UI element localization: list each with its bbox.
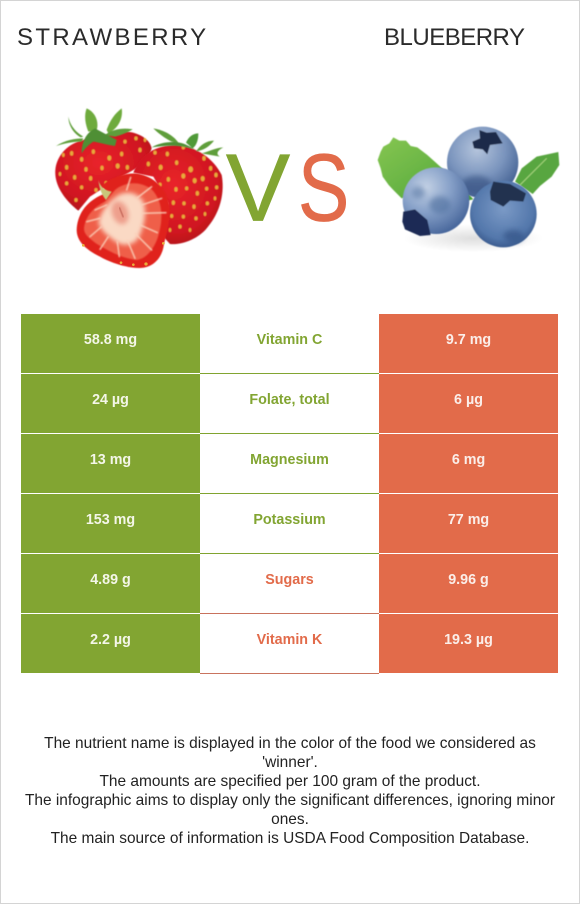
row: Vitamin C: 58.8 mg — [84, 332, 137, 348]
row: Vitamin K: 2.2 µg — [90, 632, 131, 648]
front berry — [470, 181, 537, 247]
row: Magnesium: 13 mg — [90, 452, 131, 468]
row: Potassium: 153 mg — [86, 512, 135, 528]
row: Vitamin K: Vitamin K — [257, 632, 322, 648]
right leaves — [152, 128, 223, 157]
row: Sugars: 4.89 g — [90, 572, 131, 588]
footnote text: The nutrient name is displayed in the color of the food we considered as — [44, 735, 536, 752]
cut strawberry — [77, 173, 170, 268]
title: strawberry: STRAWBERRY — [17, 24, 209, 51]
row: Vitamin C: Vitamin C — [257, 332, 322, 348]
row: Vitamin K: 19.3 µg — [444, 632, 493, 648]
footnote text: The infographic aims to display only the significant differences, ignoring minor — [25, 792, 555, 809]
row: Sugars — [21, 554, 558, 614]
footnote text: The amounts are specified per 100 gram of the product. — [99, 773, 480, 790]
row: Potassium: Potassium — [253, 512, 326, 528]
title: blueberry: BLUEBERRY — [384, 24, 524, 51]
row: Sugars: 9.96 g — [448, 572, 489, 588]
right leaf — [515, 152, 559, 194]
row: Vitamin C — [21, 314, 558, 374]
row: Potassium: 77 mg — [448, 512, 489, 528]
row: Magnesium: Magnesium — [250, 452, 329, 468]
row: Folate, total: 24 µg — [92, 392, 129, 408]
footnote text — [25, 735, 555, 847]
row: Sugars: Sugars — [265, 572, 314, 588]
footnote text: ones. — [271, 811, 309, 828]
row: Folate, total: 6 µg — [454, 392, 483, 408]
footnote text: 'winner'. — [262, 754, 318, 771]
icon: strawberries — [54, 108, 224, 269]
shadow — [403, 224, 543, 252]
right berry — [133, 145, 223, 244]
left berry — [402, 167, 469, 236]
table: nutrient comparison — [21, 314, 558, 674]
footnote text: The main source of information is USDA Food Composition Database. — [51, 830, 529, 847]
top berry — [447, 127, 518, 198]
back left leaves — [56, 108, 133, 153]
row: Potassium — [21, 494, 558, 554]
row: Folate, total — [21, 374, 558, 434]
icon: blueberries — [377, 126, 560, 248]
back left berry — [55, 131, 152, 211]
row: Folate, total: Folate, total — [249, 392, 330, 408]
row: Vitamin K — [21, 614, 558, 674]
row: Magnesium: 6 mg — [452, 452, 485, 468]
row: Vitamin C: 9.7 mg — [446, 332, 491, 348]
left leaf — [378, 137, 473, 203]
row: Magnesium — [21, 434, 558, 494]
